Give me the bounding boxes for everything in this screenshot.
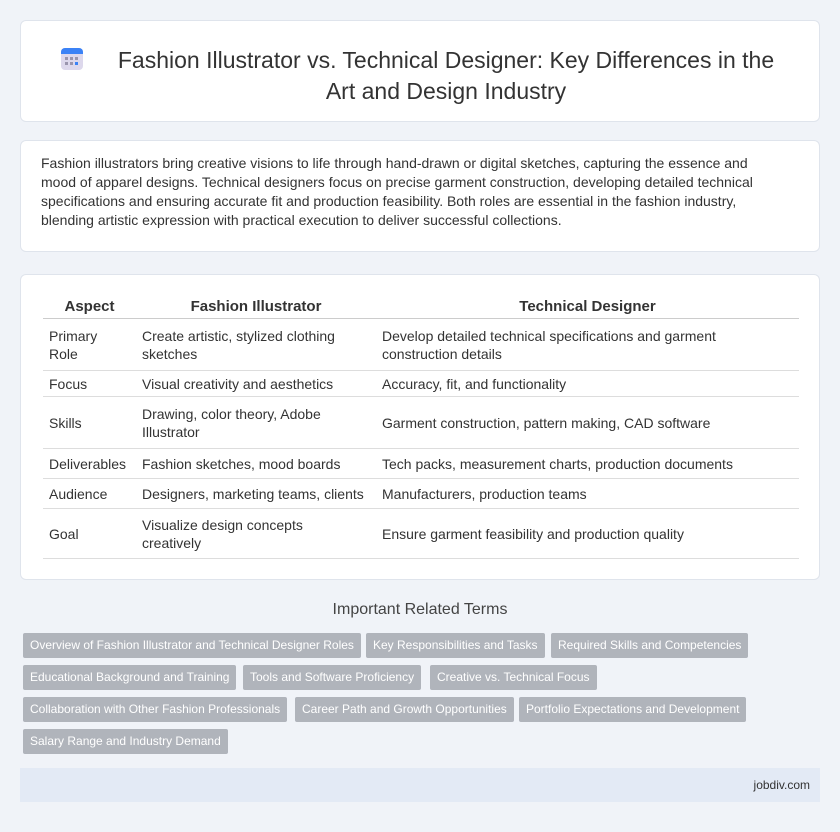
related terms tags: Career Path and Growth Opportunities — [302, 702, 507, 716]
comparison table card: Garment construction, pattern making, CAD software — [382, 414, 710, 430]
comparison table card: Deliverables — [49, 456, 126, 472]
comparison table card: Visualize design concepts — [142, 516, 303, 532]
comparison table card: Goal — [49, 526, 79, 542]
related terms tags: Creative vs. Technical Focus — [437, 670, 590, 684]
comparison table card: Accuracy, fit, and functionality — [382, 376, 566, 392]
comparison table card: Visual creativity and aesthetics — [142, 376, 333, 392]
intro text card: Fashion illustrators bring creative visions to life through hand-drawn or digital sketches, capturing the essence and mood of apparel designs. Technical designers focus on precise garment construction, developing detailed technical specifications and ensuring accurate fit and production feasibility. Both roles are essential in the fashion industry, blending artistic expression with practical execution to deliver successful collections. — [41, 155, 753, 228]
comparison table card: Technical Designer — [519, 298, 656, 315]
comparison table card: Audience — [49, 486, 107, 502]
comparison table card: Develop detailed technical specifications and garment construction details — [382, 328, 716, 362]
header card — [20, 20, 820, 122]
comparison table card: Aspect — [64, 298, 115, 315]
comparison table card: Fashion sketches, mood boards — [142, 456, 340, 472]
related terms tags: Collaboration with Other Fashion Professionals — [30, 702, 280, 716]
comparison table card: Ensure garment feasibility and production quality — [382, 526, 684, 542]
related terms tags: Salary Range and Industry Demand — [30, 734, 221, 748]
comparison table card: Tech packs, measurement charts, production documents — [382, 456, 733, 472]
comparison table card: Designers, marketing teams, clients — [142, 486, 364, 502]
comparison table card: Skills — [49, 414, 82, 430]
related terms tags: Educational Background and Training — [30, 670, 229, 684]
intro text card — [20, 140, 820, 252]
icon: calendar — [61, 48, 83, 70]
comparison table card: Focus — [49, 376, 87, 392]
related terms tags: Tools and Software Proficiency — [250, 670, 414, 684]
comparison table card: Fashion Illustrator — [191, 298, 321, 315]
title: Fashion Illustrator vs. Technical Designer: Key Differences in the Art and Design Industry — [118, 47, 774, 104]
related terms tags: Overview of Fashion Illustrator and Technical Designer Roles — [30, 638, 354, 652]
comparison table card: Role — [49, 346, 78, 362]
comparison table card: creatively — [142, 534, 201, 550]
comparison table card: Primary — [49, 328, 97, 344]
related terms heading: Important Related Terms — [333, 601, 507, 618]
comparison table card: Drawing, color theory, Adobe Illustrator — [142, 406, 321, 440]
related terms tags: Key Responsibilities and Tasks — [373, 638, 538, 652]
related terms tags — [23, 633, 748, 754]
related terms tags: Portfolio Expectations and Development — [526, 702, 739, 716]
comparison table card: Create artistic, stylized clothing sketches — [142, 328, 335, 362]
related terms tags: Required Skills and Competencies — [558, 638, 741, 652]
comparison table card: Manufacturers, production teams — [382, 486, 587, 502]
footer: jobdiv.com — [754, 778, 810, 792]
comparison table card — [20, 274, 820, 580]
footer — [20, 768, 820, 802]
